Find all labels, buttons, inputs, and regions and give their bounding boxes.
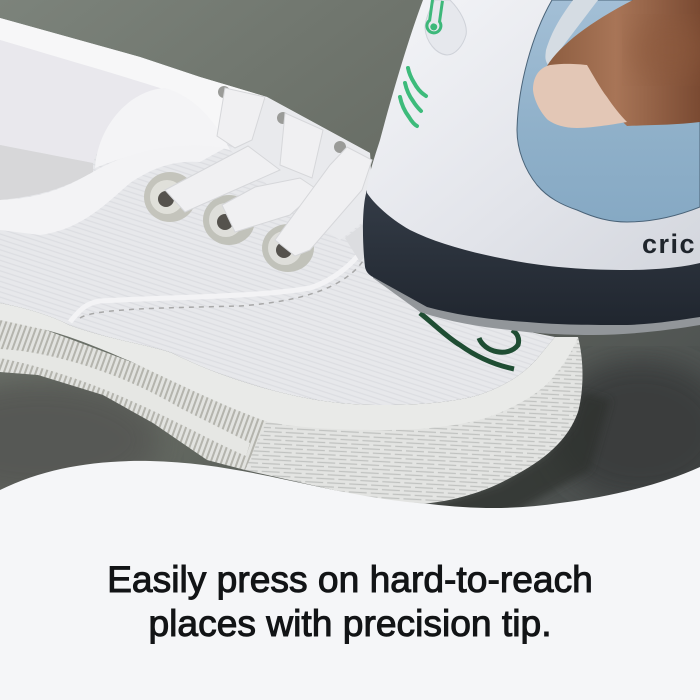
background fabric — [0, 0, 700, 530]
iron logo: cric — [642, 229, 696, 259]
tread divider strip — [0, 349, 250, 456]
iron — [363, 0, 700, 335]
thumb nail — [533, 64, 627, 128]
steam icon — [400, 68, 426, 126]
iron dark base — [363, 190, 700, 325]
laces — [165, 88, 372, 256]
caption text: places with precision tip. — [148, 602, 552, 644]
insole — [0, 145, 93, 200]
bottom wave panel — [0, 461, 700, 700]
finger — [547, 0, 700, 126]
thermometer icon — [426, 0, 444, 34]
iron soleplate — [373, 270, 700, 335]
shoe rim — [0, 303, 578, 430]
caption text: Easily press on hard-to-reach — [107, 558, 593, 600]
shoe interior lining — [0, 40, 160, 163]
canvas upper — [0, 18, 555, 405]
white collar top — [0, 18, 267, 142]
hand — [533, 0, 700, 128]
iron button — [425, 0, 466, 55]
iron handle strip — [545, 0, 598, 65]
eyelets — [144, 172, 314, 272]
green transfer design on toe — [420, 313, 519, 369]
eyelet band — [0, 145, 225, 235]
iron blue handle recess — [517, 0, 700, 222]
rounded tongue piece — [95, 88, 230, 168]
caption text — [107, 558, 593, 644]
upper top eyelets — [218, 86, 346, 153]
shoe outsole: toe-side tread — [245, 337, 582, 505]
shoe — [0, 18, 582, 505]
toe stitching — [70, 245, 366, 322]
shoe outsole: heel-side tread — [0, 318, 268, 470]
iron white body — [367, 0, 700, 270]
eyelet facing — [230, 97, 372, 240]
